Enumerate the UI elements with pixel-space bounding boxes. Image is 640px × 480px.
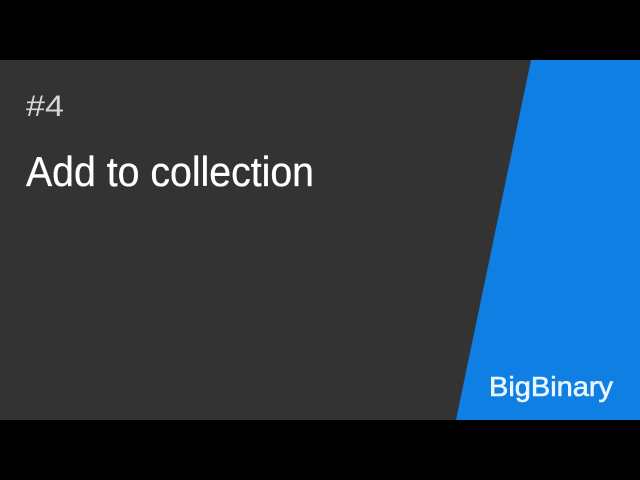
episode number: #4 bbox=[26, 90, 64, 123]
panel: dark background bbox=[0, 60, 640, 420]
brand logo text: BigBinary bbox=[489, 371, 613, 402]
title: Add to collection bbox=[26, 148, 314, 195]
panel: blue slanted area bbox=[456, 60, 640, 420]
